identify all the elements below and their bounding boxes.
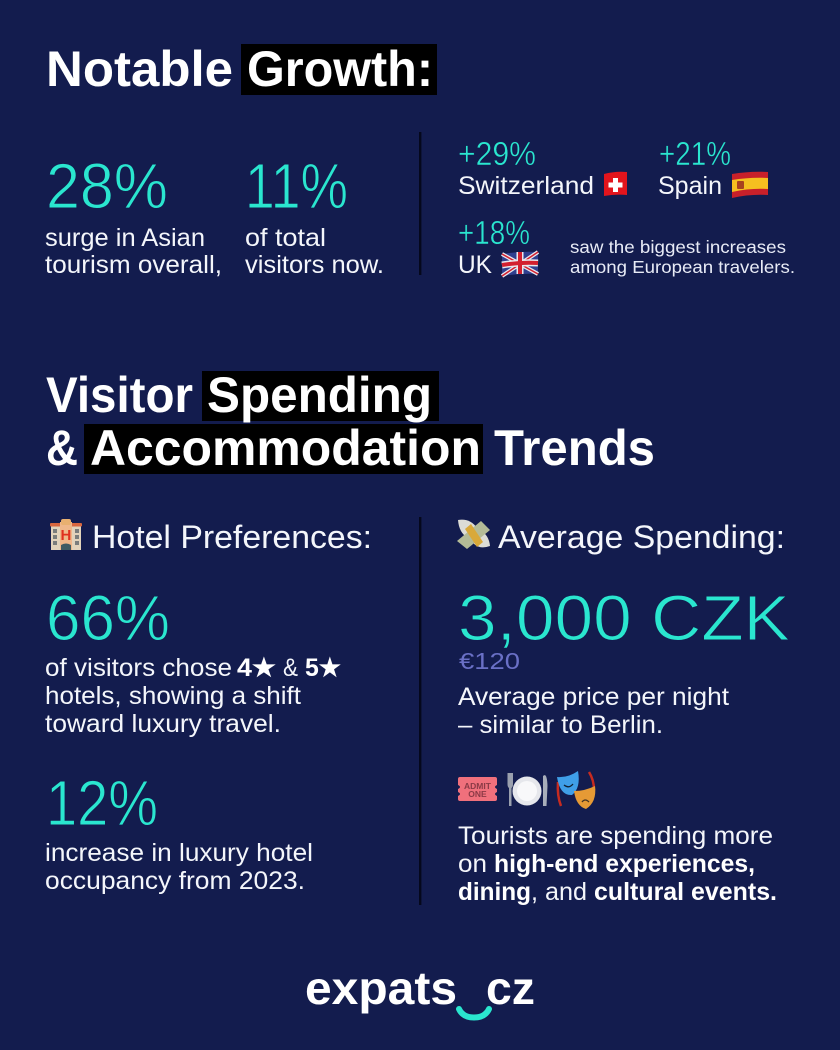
stat: UK +18%: UK (458, 251, 492, 279)
stat: 28% Asian tourism surge: 28% (46, 150, 168, 222)
text: biggest increases among European travelers (570, 237, 795, 277)
stat: 28% Asian tourism surge (45, 150, 222, 279)
stat: 11% of total visitors (245, 150, 384, 279)
text: biggest increases among European travelers: saw the biggest increases (570, 237, 786, 257)
heading: Visitor Spending & Accommodation Trends: & (46, 420, 78, 476)
panel: Average Spending (457, 519, 790, 906)
stat: 11% of total visitors: visitors now. (245, 251, 384, 279)
stat: 66% chose 4 and 5 star hotels: 66% (46, 582, 170, 654)
icon: money with wings (457, 520, 490, 549)
heading: Notable Growth: Notable (46, 41, 233, 97)
text: tourists spending on experiences (458, 822, 777, 906)
stat: UK +18% (458, 214, 538, 279)
stat: Switzerland +29%: +29% (458, 135, 536, 172)
stat: 66% chose 4 and 5 star hotels: toward luxury travel. (45, 710, 281, 738)
text: average price per night: – similar to Berlin. (458, 711, 663, 739)
heading: Visitor Spending & Accommodation Trends (46, 367, 655, 476)
stat: UK +18%: +18% (458, 214, 530, 251)
icon: ticket: ONE (468, 789, 487, 799)
stat: Switzerland +29% (458, 135, 627, 200)
logo: expats.cz: expats (305, 962, 457, 1014)
heading: Average Spending: Average Spending: (498, 519, 785, 555)
logo: expats.cz (305, 962, 535, 1018)
icon: flag of UK (502, 252, 538, 276)
text: tourists spending on experiences: on (458, 850, 487, 878)
icon: theatre masks (557, 771, 595, 809)
stat: 66% chose 4 and 5 star hotels: 5★ (305, 654, 342, 682)
text: tourists spending on experiences: Tourists are spending more (458, 822, 773, 850)
text: tourists spending on experiences: , and (531, 878, 587, 906)
heading: Visitor Spending & Accommodation Trends: Trends (494, 420, 655, 476)
stat: 12% increase in luxury occupancy: occupancy from 2023. (45, 867, 305, 895)
icon: flag of Switzerland (604, 172, 627, 196)
stat: 66% chose 4 and 5 star hotels: hotels, showing a shift (45, 682, 301, 710)
logo: expats.cz: cz (486, 962, 535, 1014)
stat: Switzerland +29%: Switzerland (458, 172, 594, 200)
text: average price per night: Average price per night (458, 683, 729, 711)
icon: flag of Spain (732, 172, 768, 198)
icons: ticket, plate, theatre masks (458, 771, 595, 809)
stat: 3,000 CZK: 3,000 CZK (458, 582, 790, 654)
text: biggest increases among European travelers: among European travelers. (570, 257, 795, 277)
heading: Visitor Spending & Accommodation Trends: Visitor (46, 367, 193, 423)
icon: plate and cutlery (508, 773, 548, 806)
stat: 11% of total visitors: of total (245, 224, 326, 252)
text: average price per night (458, 683, 729, 739)
stat: 66% chose 4 and 5 star hotels: & (283, 654, 298, 682)
icon: ticket (458, 777, 497, 801)
stat: 12% increase in luxury occupancy: 12% (46, 767, 158, 839)
stat: 12% increase in luxury occupancy: increase in luxury hotel (45, 839, 313, 867)
stat: Spain +21%: +21% (659, 135, 731, 172)
stat: Spain +21%: Spain (658, 172, 722, 200)
heading: Visitor Spending & Accommodation Trends: Accommodation (90, 420, 481, 476)
heading: Notable Growth: Growth: (247, 41, 433, 97)
stat: 28% Asian tourism surge: surge in Asian (45, 224, 205, 252)
heading: Visitor Spending & Accommodation Trends: Spending (207, 367, 432, 423)
panel: Hotel Preferences (45, 519, 372, 895)
icon: hotel: H (60, 527, 71, 544)
text: tourists spending on experiences: high-end experiences, (494, 850, 755, 878)
stat: 11% of total visitors: 11% (245, 150, 348, 222)
stat: Spain +21% (658, 135, 768, 200)
icon: hotel (50, 519, 82, 550)
text: tourists spending on experiences: dining (458, 878, 531, 906)
stat: 66% chose 4 and 5 star hotels: 4★ (237, 654, 277, 682)
text: tourists spending on experiences: cultural events. (594, 878, 777, 906)
stat: 28% Asian tourism surge: tourism overall, (45, 251, 222, 279)
stat: 66% chose 4 and 5 star hotels: of visitors chose (45, 654, 232, 682)
heading: Notable Growth (46, 41, 437, 97)
icon: ticket: ADMIT (464, 781, 492, 791)
icon: smile (459, 1009, 489, 1018)
heading: Hotel Preferences: Hotel Preferences: (92, 519, 372, 555)
stat: 66% chose 4 and 5 star hotels (45, 582, 342, 738)
stat: 120 euro: €120 (459, 648, 520, 674)
stat: 12% increase in luxury occupancy (45, 767, 313, 895)
